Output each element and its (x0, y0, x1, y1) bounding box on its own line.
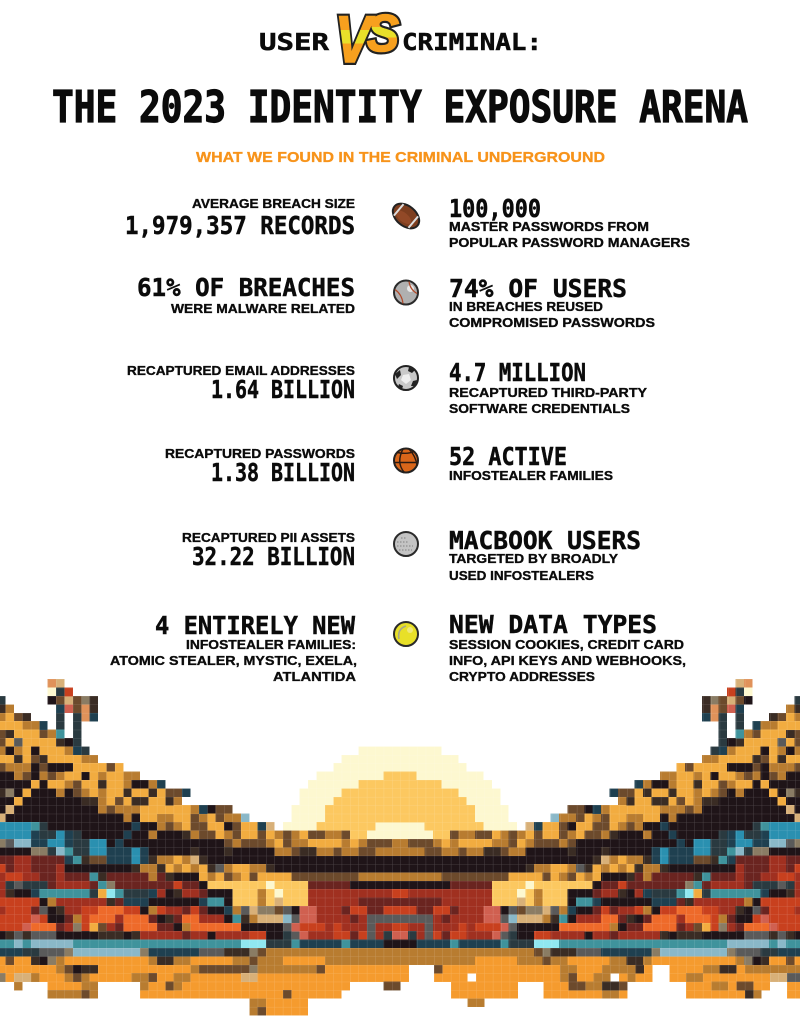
subtitle: WHAT WE FOUND IN THE CRIMINAL UNDERGROUND (196, 150, 605, 166)
stat: master passwords: MASTER PASSWORDS FROM (449, 219, 649, 234)
pixel art stadium with sunset (0, 679, 800, 1015)
stat: third-party credentials (449, 358, 647, 416)
stat: new data types: CRYPTO ADDRESSES (449, 669, 595, 684)
stat: macbook users (449, 526, 641, 583)
stat: PII assets: RECAPTURED PII ASSETS (182, 530, 355, 545)
stat: email addresses (127, 363, 355, 404)
stat: third-party credentials: SOFTWARE CREDENTIALS (449, 401, 630, 416)
stat: passwords (165, 446, 355, 487)
sports ball icons (388, 199, 424, 646)
stat: passwords: RECAPTURED PASSWORDS (165, 446, 355, 461)
stat: email addresses: RECAPTURED EMAIL ADDRESSES (127, 363, 355, 378)
stat: master passwords (449, 194, 690, 250)
icon: tennis ball (394, 622, 418, 646)
stat: new infostealer families: ATLANTIDA (273, 669, 357, 684)
stat: master passwords: 100,000 (449, 194, 541, 223)
stat: master passwords: POPULAR PASSWORD MANAGERS (449, 235, 690, 250)
stat: PII assets (182, 530, 355, 571)
stat: malware breaches (137, 273, 355, 316)
stat: average breach size: 1,979,357 RECORDS (125, 211, 355, 240)
icon: baseball (394, 280, 418, 304)
stat: new infostealer families: INFOSTEALER FAMILIES: (186, 637, 356, 652)
icon: VS badge: S (367, 5, 399, 63)
heading word: criminal: CRIMINAL: (402, 30, 542, 56)
stat: active families: 52 ACTIVE (449, 442, 567, 471)
stat: third-party credentials: 4.7 MILLION (449, 358, 586, 387)
pixel grid lines (0, 679, 800, 1015)
stat: new infostealer families: 4 ENTIRELY NEW (155, 611, 356, 640)
stat: malware breaches: 61% OF BREACHES (137, 273, 355, 302)
stat: macbook users: MACBOOK USERS (449, 526, 641, 555)
icon: VS badge: V (335, 2, 375, 76)
stat: reused passwords: IN BREACHES REUSED (449, 299, 603, 314)
right column stats (449, 194, 690, 684)
stat: new infostealer families: ATOMIC STEALER, MYSTIC, EXELA, (110, 653, 357, 668)
stat: new data types (449, 610, 686, 684)
icon: VS badge: S (367, 5, 399, 63)
stat: reused passwords: 74% OF USERS (449, 274, 627, 303)
heading word: user: USER (259, 30, 329, 56)
stat: malware breaches: WERE MALWARE RELATED (171, 301, 355, 316)
stat: PII assets: 32.22 BILLION (192, 542, 355, 571)
right half, mirrored (399, 684, 800, 961)
stat: new data types: SESSION COOKIES, CREDIT CARD (449, 637, 684, 652)
stat: email addresses: 1.64 BILLION (211, 375, 355, 404)
stat: average breach size (125, 196, 355, 240)
stat: active families: INFOSTEALER FAMILIES (449, 468, 613, 483)
left column stats (110, 196, 357, 684)
stat: active families (449, 442, 613, 483)
icon: soccer ball (394, 366, 418, 390)
stat: reused passwords (449, 274, 655, 330)
stat: new infostealer families (110, 611, 357, 684)
stat: average breach size: AVERAGE BREACH SIZE (192, 196, 355, 211)
stat: new data types: NEW DATA TYPES (449, 610, 657, 639)
icon: football (388, 199, 424, 233)
icon: VS badge (335, 2, 399, 76)
icon: basketball (394, 448, 418, 472)
bottom edge of arena (0, 969, 800, 1011)
stat: third-party credentials: RECAPTURED THIRD-PARTY (449, 385, 647, 400)
stat: reused passwords: COMPROMISED PASSWORDS (449, 315, 655, 330)
icon: golf ball (394, 532, 418, 556)
stat: passwords: 1.38 BILLION (211, 458, 355, 487)
title: user vs criminal (259, 2, 542, 76)
stat: macbook users: USED INFOSTEALERS (449, 568, 594, 583)
icon: VS badge: V (335, 2, 375, 76)
stat: new data types: INFO, API KEYS AND WEBHOOKS, (449, 653, 686, 668)
stat: macbook users: TARGETED BY BROADLY (449, 551, 618, 566)
